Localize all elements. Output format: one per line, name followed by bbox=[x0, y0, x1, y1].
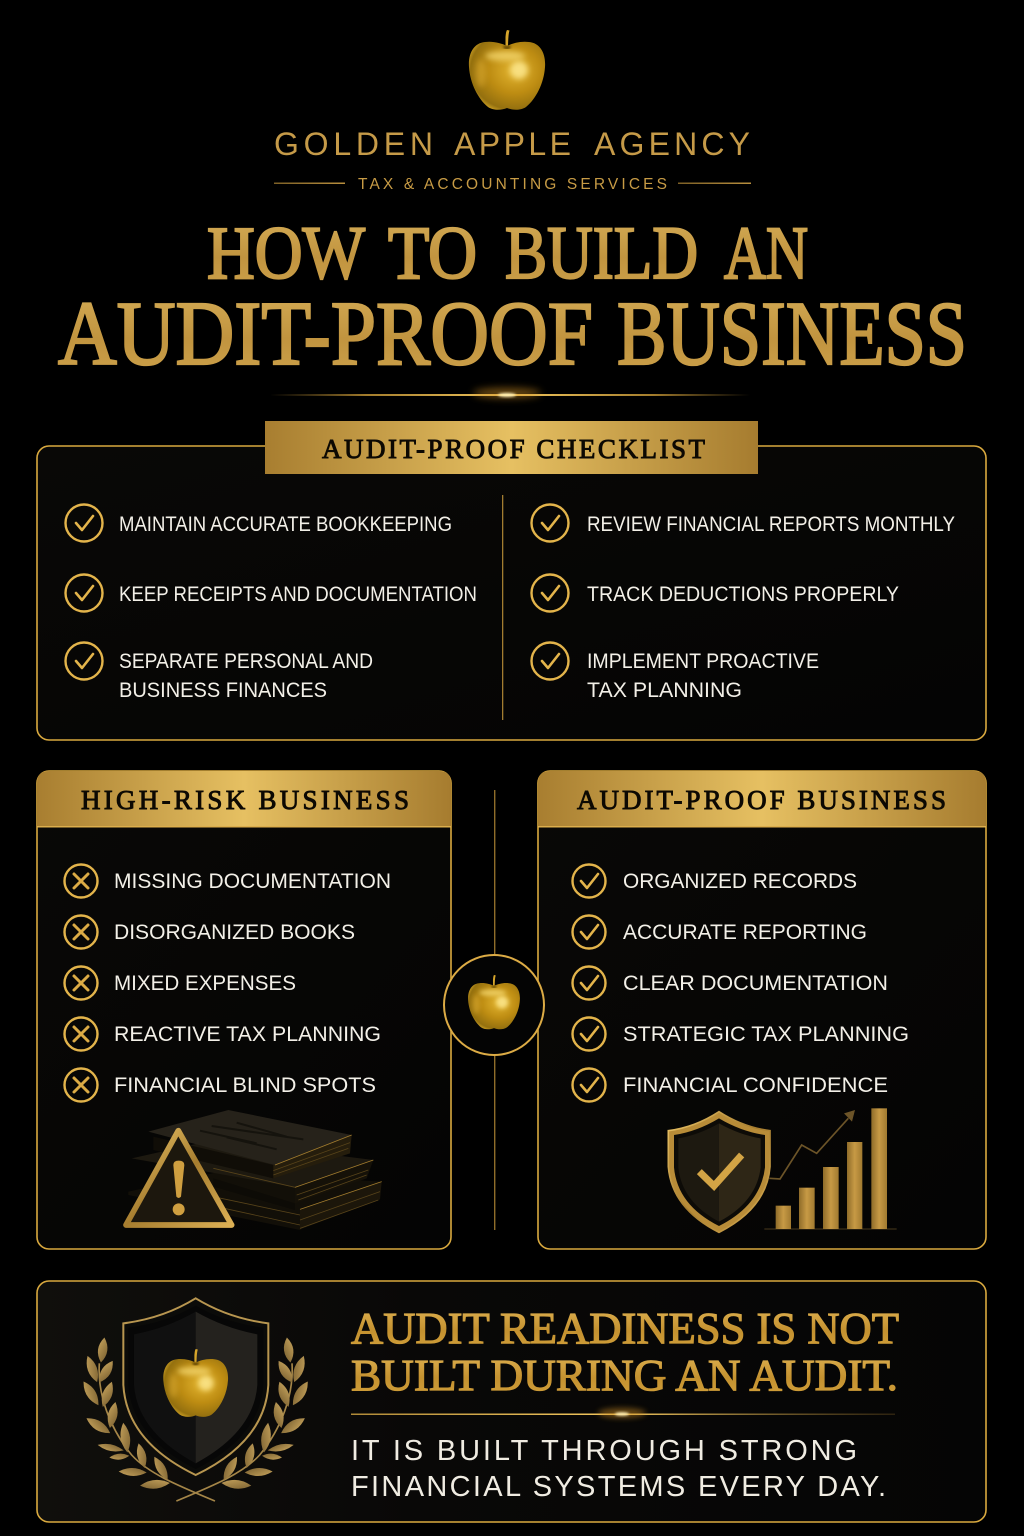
checklist item: REVIEW FINANCIAL REPORTS MONTHLY bbox=[587, 513, 955, 536]
risk item: FINANCIAL BLIND SPOTS bbox=[114, 1074, 376, 1097]
risk item: DISORGANIZED BOOKS bbox=[114, 921, 355, 944]
panel: audit-proof business bbox=[538, 771, 986, 1249]
center divider with apple medallion bbox=[444, 790, 544, 1230]
title divider bbox=[270, 388, 750, 398]
checklist banner bbox=[265, 421, 758, 474]
closing headline: BUILT DURING AN AUDIT. bbox=[351, 1351, 898, 1400]
risk item bbox=[64, 1018, 381, 1050]
checklist item: BUSINESS FINANCES bbox=[119, 679, 327, 702]
illustration: shield and rising bar chart bbox=[668, 1108, 897, 1232]
title: AUDIT-PROOF bbox=[58, 283, 593, 384]
risk item: REACTIVE TAX PLANNING bbox=[114, 1023, 381, 1046]
risk item bbox=[64, 1068, 376, 1102]
brand name: AGENCY bbox=[594, 126, 750, 162]
proof item bbox=[572, 1018, 909, 1050]
panel: audit-proof checklist bbox=[37, 421, 986, 740]
checklist item bbox=[66, 642, 373, 702]
risk item bbox=[64, 864, 391, 898]
checklist item: SEPARATE PERSONAL AND bbox=[119, 650, 373, 673]
risk item: MIXED EXPENSES bbox=[114, 972, 296, 995]
checklist item bbox=[532, 642, 819, 702]
checklist item bbox=[532, 574, 899, 612]
proof item bbox=[572, 916, 867, 948]
closing text: IT IS BUILT THROUGH STRONG bbox=[351, 1435, 857, 1467]
title: HOW bbox=[207, 212, 365, 295]
risk item bbox=[64, 916, 355, 948]
checklist item: KEEP RECEIPTS AND DOCUMENTATION bbox=[119, 583, 477, 606]
title: TO bbox=[388, 212, 477, 295]
proof item bbox=[572, 1068, 888, 1102]
proof item: ORGANIZED RECORDS bbox=[623, 870, 857, 893]
brand name: APPLE bbox=[454, 126, 571, 162]
audit-proof header: AUDIT-PROOF BUSINESS bbox=[577, 785, 946, 815]
closing text: FINANCIAL SYSTEMS EVERY DAY. bbox=[351, 1471, 886, 1503]
checklist item bbox=[66, 504, 452, 542]
proof item bbox=[572, 864, 857, 898]
checklist item: MAINTAIN ACCURATE BOOKKEEPING bbox=[119, 513, 452, 536]
checklist item: IMPLEMENT PROACTIVE bbox=[587, 650, 819, 673]
checklist item bbox=[66, 574, 477, 612]
title: AN bbox=[724, 212, 808, 295]
closing headline bbox=[351, 1304, 899, 1400]
panel: closing statement bbox=[37, 1281, 986, 1522]
closing text bbox=[351, 1435, 886, 1503]
audit-proof header bbox=[538, 771, 986, 828]
brand name bbox=[274, 126, 750, 162]
title bbox=[58, 212, 967, 384]
panel: high-risk business bbox=[37, 771, 451, 1249]
high-risk header: HIGH-RISK BUSINESS bbox=[81, 785, 409, 815]
risk item: MISSING DOCUMENTATION bbox=[114, 870, 391, 893]
title: BUILD bbox=[505, 212, 698, 295]
closing headline: AUDIT READINESS IS NOT bbox=[351, 1304, 899, 1353]
proof item bbox=[572, 966, 888, 1000]
emblem: shield, apple and laurel bbox=[80, 1298, 312, 1501]
proof item: STRATEGIC TAX PLANNING bbox=[623, 1023, 909, 1046]
checklist item bbox=[532, 504, 955, 542]
checklist item: TRACK DEDUCTIONS PROPERLY bbox=[587, 583, 899, 606]
proof item: FINANCIAL CONFIDENCE bbox=[623, 1074, 888, 1097]
proof item: CLEAR DOCUMENTATION bbox=[623, 972, 888, 995]
closing divider bbox=[351, 1408, 895, 1418]
checklist item: TAX PLANNING bbox=[587, 679, 742, 702]
proof item: ACCURATE REPORTING bbox=[623, 921, 867, 944]
risk item bbox=[64, 966, 296, 1000]
brand tagline: TAX & ACCOUNTING SERVICES bbox=[358, 176, 667, 193]
brand name: GOLDEN bbox=[274, 126, 433, 162]
icon: golden apple logo bbox=[469, 30, 545, 110]
illustration: paper stacks and warning triangle bbox=[126, 1110, 382, 1230]
high-risk header bbox=[37, 771, 451, 828]
checklist banner: AUDIT-PROOF CHECKLIST bbox=[322, 434, 706, 464]
